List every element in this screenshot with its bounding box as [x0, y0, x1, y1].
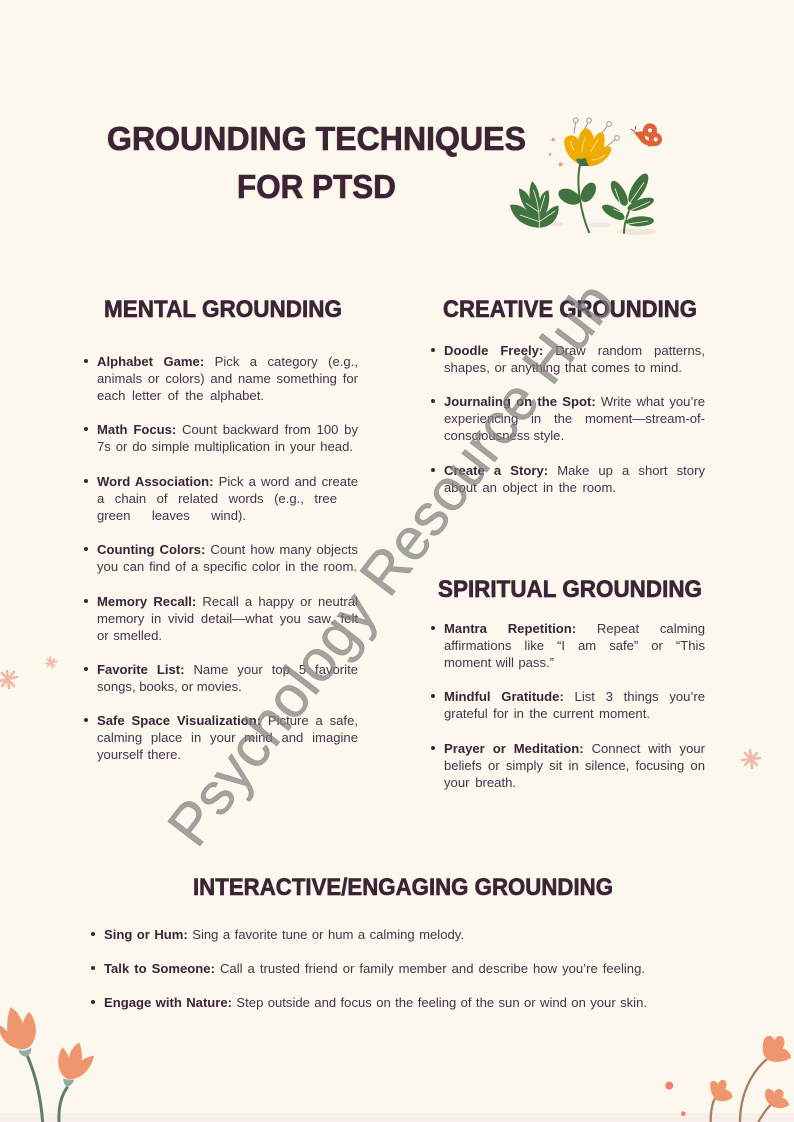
list item: mantra repetition [430, 620, 705, 670]
list item: counting colors [83, 540, 358, 574]
list item: create a story: Create a Story: Make up a short story [444, 462, 705, 478]
title [106, 120, 526, 206]
list item: prayer or meditation [430, 740, 705, 790]
title: FOR PTSD [236, 168, 395, 206]
list item: journaling on the spot: Journaling on the Spot: Write what you’re [444, 394, 705, 408]
panel: interactive grounding [91, 874, 647, 1010]
watermark: Psychology Resource Hub [155, 270, 627, 858]
list item: sing or hum: Sing or Hum: Sing a favorite tune or hum a calming melody. [104, 926, 464, 942]
list item: prayer or meditation: Prayer or Meditation: Connect with your [444, 740, 705, 756]
icon: bottom-right flowers [665, 1036, 791, 1122]
list item: safe space visualization [83, 712, 358, 762]
list item: journaling on the spot: consciousness style. [444, 428, 564, 442]
list item: doodle freely [430, 342, 705, 376]
list item: alphabet game: each letter of the alphabet. [97, 388, 264, 402]
list item: favorite list: songs, books, or movies. [97, 678, 242, 694]
panel: spiritual grounding [431, 576, 705, 790]
icon: bottom-left tulips [0, 1007, 94, 1122]
list item: prayer or meditation: your breath. [444, 774, 516, 790]
icon: asterisks left [0, 656, 58, 690]
list item: safe space visualization: Safe Space Visualization: Picture a safe, [97, 712, 358, 728]
list item: memory recall [83, 592, 358, 644]
bottom band [0, 1113, 794, 1122]
list item: alphabet game [83, 352, 358, 404]
list item: mantra repetition: affirmations like “I am safe” or “This [444, 638, 705, 652]
heading: interactive grounding: INTERACTIVE/ENGAGING GROUNDING [192, 874, 612, 901]
heading: mental grounding: MENTAL GROUNDING [104, 296, 342, 323]
list item: favorite list: Favorite List: Name your top 5 favorite [97, 662, 358, 676]
heading: spiritual grounding: SPIRITUAL GROUNDING [438, 576, 702, 603]
list item: mindful gratitude [430, 688, 705, 722]
list item: mantra repetition: Mantra Repetition: Repeat calming [444, 620, 705, 636]
list item: word association [83, 472, 358, 524]
list item: mindful gratitude: Mindful Gratitude: List 3 things you’re [444, 688, 705, 704]
heading: interactive grounding: INTERACTIVE/ENGAGING GROUNDING [193, 874, 613, 901]
list item: counting colors: you can find of a specific color in the room. [97, 558, 357, 574]
title: GROUNDING TECHNIQUES [106, 120, 525, 158]
title: FOR PTSD [237, 168, 396, 205]
list item: word association: Word Association: Pick a word and create [97, 474, 358, 488]
list item: math focus [83, 420, 358, 454]
list item: create a story: about an object in the room. [444, 480, 616, 494]
list item: memory recall: memory in vivid detail—what you saw, felt [97, 610, 358, 626]
panel: creative grounding [431, 296, 705, 494]
list item: safe space visualization: yourself there. [97, 746, 181, 762]
list item: memory recall: or smelled. [97, 628, 162, 642]
list item: memory recall: Memory Recall: Recall a happy or neutral [97, 594, 358, 608]
list item: word association: green leaves wind). [97, 508, 246, 522]
heading: creative grounding: CREATIVE GROUNDING [442, 296, 696, 323]
panel: mental grounding [84, 296, 358, 762]
list item: mantra repetition: moment will pass.” [444, 654, 554, 670]
heading: mental grounding: MENTAL GROUNDING [104, 296, 342, 323]
list item: talk to someone: Talk to Someone: Call a trusted friend or family member and describe how you’re feeling. [104, 960, 645, 976]
list item: prayer or meditation: beliefs or simply sit in silence, focusing on [444, 758, 705, 772]
list item: favorite list [83, 660, 358, 694]
list item: engage with nature: Engage with Nature: Step outside and focus on the feeling of the sun or wind on your skin. [104, 994, 647, 1010]
list item: journaling on the spot: experiencing in the moment—stream-of- [444, 410, 705, 426]
list item: math focus: Math Focus: Count backward from 100 by [97, 422, 358, 436]
list item: mindful gratitude: grateful for in the current moment. [444, 706, 650, 720]
list item: doodle freely: shapes, or anything that comes to mind. [444, 360, 682, 374]
title: GROUNDING TECHNIQUES [107, 120, 526, 157]
list item: alphabet game: Alphabet Game: Pick a category (e.g., [97, 354, 358, 368]
heading: spiritual grounding: SPIRITUAL GROUNDING [438, 576, 702, 603]
list item: counting colors: Counting Colors: Count how many objects [97, 542, 358, 556]
list item: journaling on the spot [430, 392, 705, 444]
list item: create a story [430, 462, 705, 496]
list item: doodle freely: Doodle Freely: Draw random patterns, [444, 342, 705, 358]
list item: safe space visualization: calming place in your mind and imagine [97, 730, 358, 744]
heading: creative grounding: CREATIVE GROUNDING [443, 296, 697, 323]
icon: flower, leaves and butterfly illustration [510, 118, 662, 235]
list item: math focus: 7s or do simple multiplication in your head. [97, 438, 353, 454]
list item: alphabet game: animals or colors) and name something for [97, 370, 358, 386]
icon: asterisk right [740, 748, 762, 770]
list item: word association: a chain of related words (e.g., tree [97, 490, 337, 506]
